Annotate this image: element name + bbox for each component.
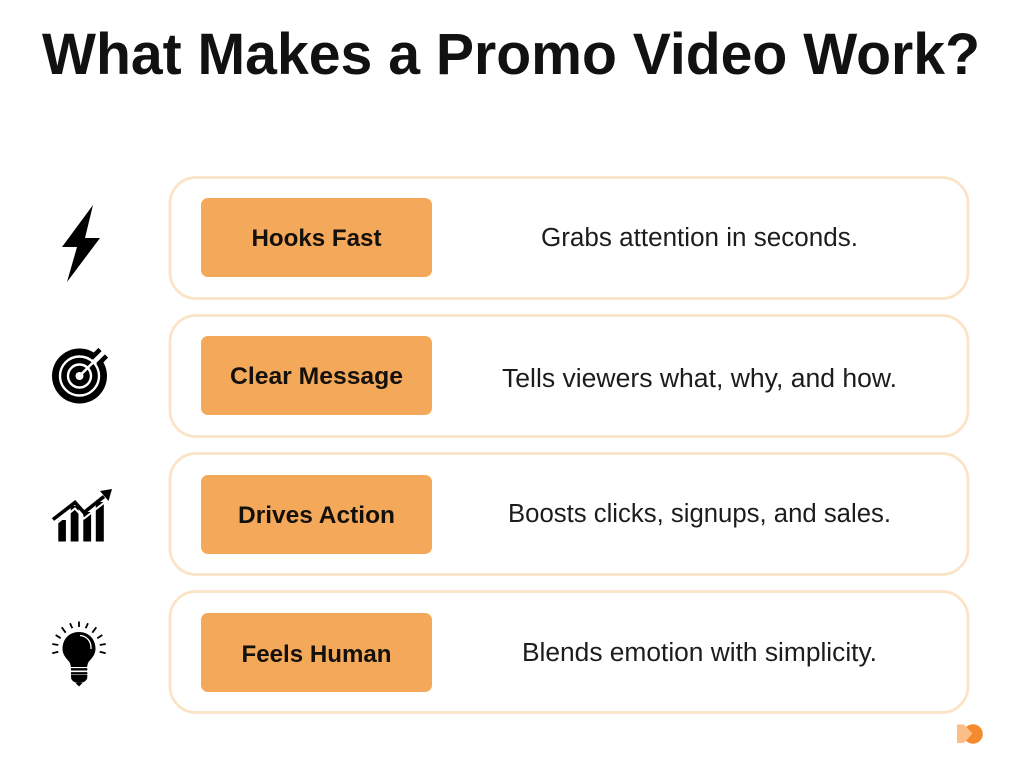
tag: hooks fast: Hooks Fast [252, 225, 382, 252]
tag: drives action [201, 475, 432, 554]
description: drives action: Boosts clicks, signups, and sales. [508, 500, 891, 528]
tag: clear message [201, 336, 432, 415]
tag: hooks fast [201, 198, 432, 277]
panel: hooks fast [170, 178, 968, 298]
description: feels human: Blends emotion with simplicity. [522, 639, 877, 667]
tag: feels human [201, 613, 432, 692]
tag: clear message: Clear Message [230, 363, 403, 390]
panel: clear message [170, 316, 968, 436]
description: hooks fast: Grabs attention in seconds. [541, 224, 858, 252]
icon: target with arrow [52, 348, 108, 404]
panel: feels human [170, 592, 968, 712]
tag: feels human: Feels Human [242, 641, 392, 668]
description: clear message: Tells viewers what, why, and how. [502, 365, 897, 393]
panel: drives action [170, 454, 968, 574]
icon: rising bar chart [53, 489, 112, 542]
icon: light bulb [52, 622, 106, 686]
tag: drives action: Drives Action [238, 502, 395, 529]
title: What Makes a Promo Video Work? [42, 22, 980, 87]
icon: lightning bolt [62, 205, 100, 282]
icon: brand logo [957, 724, 983, 744]
